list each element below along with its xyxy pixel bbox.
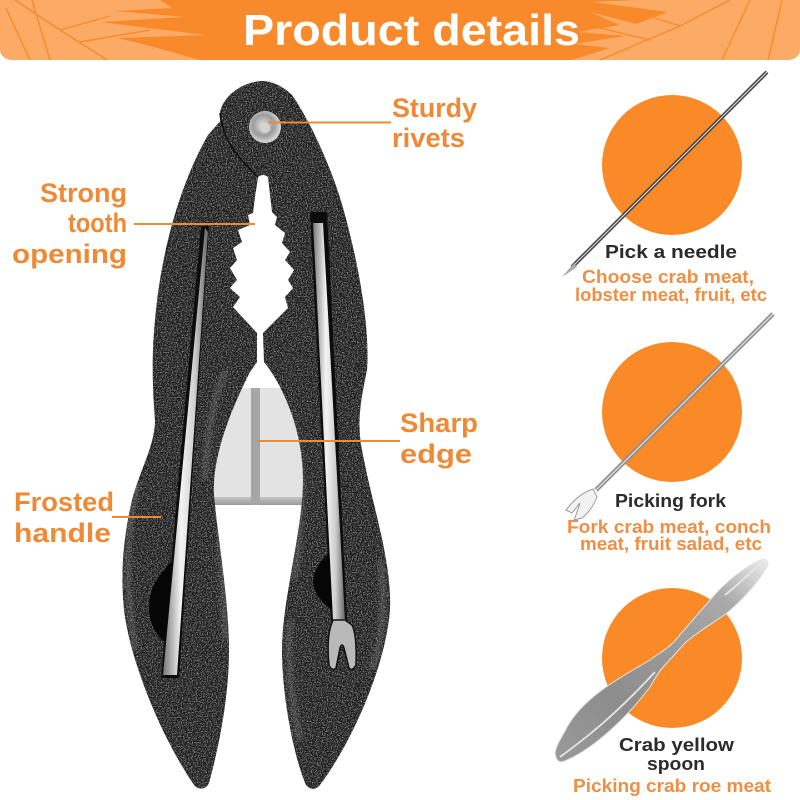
icon: needle (562, 72, 767, 277)
right fork slot (310, 212, 347, 620)
header banner (0, 0, 800, 60)
callout: sharp edge: Sharp (400, 408, 478, 438)
spoon name (619, 734, 735, 774)
left finger hollow (149, 560, 173, 642)
rivet (249, 111, 281, 143)
callout: strong tooth opening: Strong (40, 178, 127, 208)
left handle sheen (128, 370, 226, 650)
left needle slot (161, 226, 209, 678)
stored fork (313, 223, 356, 669)
callout: strong tooth opening: opening (12, 239, 127, 269)
callout: strong tooth opening: tooth (68, 208, 127, 238)
orange circle (602, 588, 742, 728)
orange circle (602, 95, 742, 235)
needle description (575, 267, 767, 305)
callout: frosted handle (14, 487, 161, 548)
spoon description: Picking crab roe meat (573, 776, 771, 796)
palm leaf decoration: right (572, 0, 800, 60)
crab cracker (122, 81, 390, 789)
title: Product details (243, 6, 580, 55)
gray block behind the cracker (213, 388, 305, 505)
orange circle (602, 342, 742, 482)
callout: sturdy rivets: rivets (392, 123, 465, 153)
right handle with pivot head (220, 81, 390, 789)
right handle sheen (289, 420, 383, 740)
right finger hollow (313, 548, 335, 612)
callout: frosted handle: Frosted (14, 487, 114, 517)
callout: sharp edge (257, 408, 478, 469)
panel: crab yellow spoon (555, 559, 771, 796)
stored needle (163, 228, 208, 675)
panel: pick a needle (562, 72, 767, 305)
icon: fork (566, 314, 773, 520)
spoon name: Crab yellow (619, 734, 735, 755)
fork description (567, 517, 771, 554)
icon: spoon (555, 559, 768, 762)
needle name: Pick a needle (605, 241, 737, 262)
fork description: meat, fruit salad, etc (580, 534, 762, 554)
callout: strong tooth opening (12, 178, 255, 269)
pivot seam (220, 113, 258, 177)
spoon name: spoon (647, 753, 705, 774)
palm leaf decoration: left (0, 0, 205, 60)
needle description: lobster meat, fruit, etc (575, 285, 767, 305)
callout: frosted handle: handle (14, 518, 111, 548)
needle description: Choose crab meat, (582, 267, 754, 287)
fork description: Fork crab meat, conch (567, 517, 771, 537)
left handle (122, 110, 258, 789)
callout: sharp edge: edge (400, 439, 472, 469)
callout: sturdy rivets: Sturdy (392, 93, 477, 123)
callout: sturdy rivets (268, 93, 477, 153)
panel: picking fork (566, 314, 773, 554)
fork name: Picking fork (615, 490, 727, 511)
